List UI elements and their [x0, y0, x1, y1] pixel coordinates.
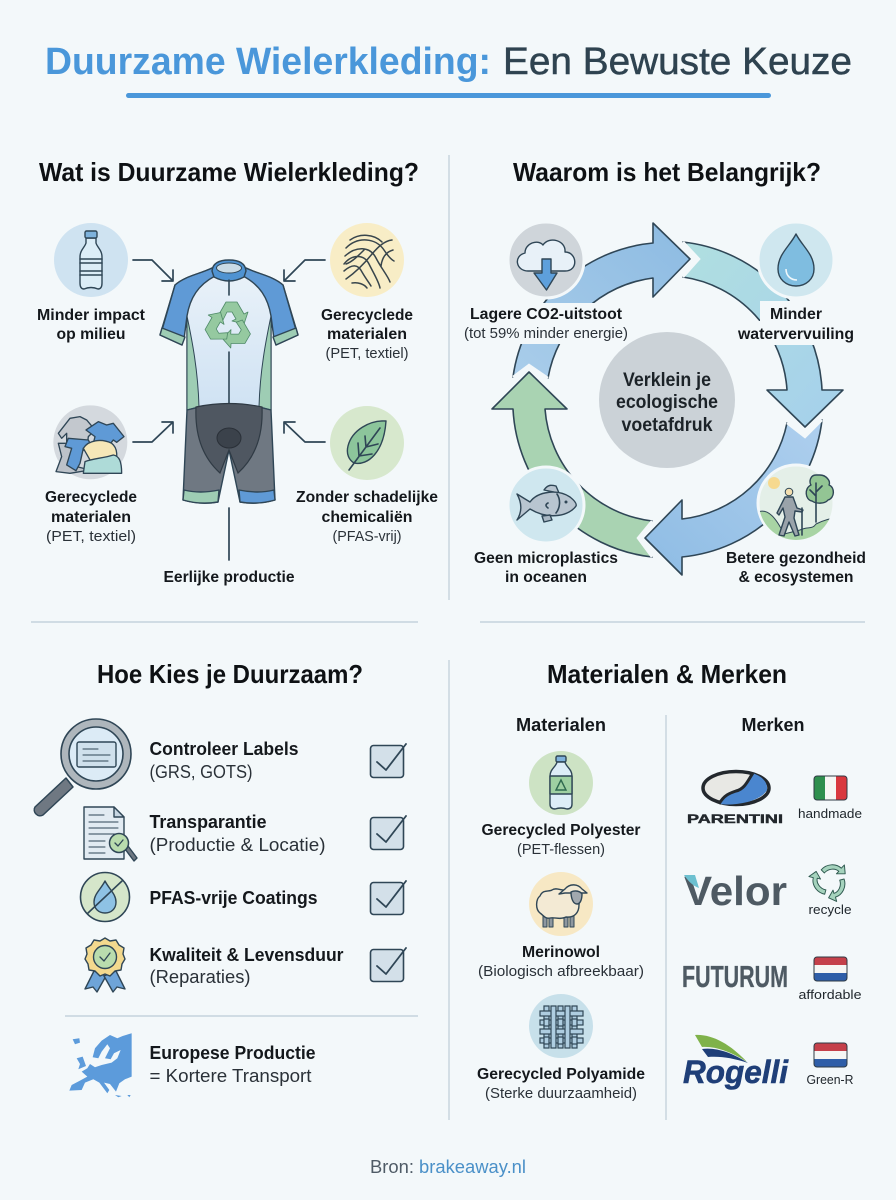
label: controleer labels: (GRS, GOTS)	[150, 762, 252, 782]
checkbox 2	[370, 816, 406, 850]
logo: rogelli	[683, 1035, 789, 1090]
label: gerecyclede materialen rechts: (PET, textiel)	[326, 345, 408, 362]
label: europese productie: Europese Productie	[150, 1043, 316, 1063]
label: minder watervervuiling: watervervuiling	[737, 326, 854, 343]
label: merinowol	[478, 944, 644, 980]
title: Duurzame Wielerkleding:	[45, 41, 491, 83]
icon: plastic bottle	[54, 223, 128, 297]
logo: futurum: FUTURUM	[682, 959, 788, 994]
icon: fish	[508, 467, 584, 543]
flag: netherlands 1	[814, 957, 847, 981]
checkbox 4	[370, 948, 406, 982]
arrows to jersey	[133, 260, 325, 560]
label: kwaliteit en levensduur: Kwaliteit & Levensduur	[150, 945, 344, 965]
cycling shorts	[183, 404, 275, 503]
label: gerecycled polyamide: (Sterke duurzaamheid)	[485, 1085, 637, 1102]
label: kwaliteit en levensduur: (Reparaties)	[150, 967, 250, 987]
label: kwaliteit en levensduur	[150, 945, 344, 987]
label: zonder schadelijke chemicalien: Zonder schadelijke	[296, 489, 438, 506]
icon: document with check	[84, 807, 137, 861]
checkbox 1	[370, 744, 406, 778]
label: minder watervervuiling: Minder	[770, 306, 822, 323]
logo: velor: Velor	[684, 868, 787, 914]
cycle arrows	[463, 223, 856, 575]
icon: hiker in nature	[758, 465, 836, 545]
label: pfas-vrije coatings: PFAS-vrije Coatings	[150, 888, 318, 908]
label: gerecycled polyamide	[477, 1066, 645, 1102]
label: eerlijke productie: Eerlijke productie	[164, 569, 295, 586]
center circle: voetafdruk	[622, 415, 713, 436]
label: minder impact: op milieu	[56, 326, 126, 343]
icon: cloud with down arrow	[508, 222, 584, 298]
label: gerecyclede materialen links: materialen	[51, 509, 131, 526]
label: transparantie	[150, 812, 326, 855]
label: controleer labels: Controleer Labels	[150, 739, 298, 759]
label: zonder schadelijke chemicalien: (PFAS-vrij)	[332, 528, 402, 545]
label: transparantie: Transparantie	[150, 812, 266, 832]
panel: waarom is het belangrijk	[463, 157, 866, 586]
label: europese productie	[150, 1043, 316, 1086]
title underline	[126, 93, 771, 98]
label: europese productie: = Kortere Transport	[150, 1066, 312, 1086]
logo: rogelli: Rogelli	[683, 1054, 789, 1090]
label: gerecycled polyester: (PET-flessen)	[517, 841, 605, 858]
label: minder impact: Minder impact	[37, 307, 146, 324]
label: betere gezondheid	[726, 550, 866, 586]
label: zonder schadelijke chemicalien: chemicaliën	[322, 509, 412, 526]
icon: yarn fibres	[330, 223, 404, 297]
label: gerecyclede materialen rechts	[321, 307, 413, 362]
icon: recycle symbol	[200, 302, 254, 353]
label: transparantie: (Productie & Locatie)	[150, 835, 326, 855]
source footer: Bron: brakeaway.nl	[370, 1157, 526, 1177]
label: betere gezondheid: & ecosystemen	[738, 569, 854, 586]
label: merinowol: (Biologisch afbreekbaar)	[478, 963, 644, 980]
icon: woven fabric	[529, 994, 593, 1058]
column heading: merken: Merken	[742, 715, 804, 735]
icon: sheep	[529, 872, 593, 936]
heading: materialen en merken: Materialen & Merken	[547, 659, 787, 689]
icon: leaf	[330, 406, 404, 480]
label: gerecycled polyamide: Gerecycled Polyamide	[477, 1066, 645, 1083]
icon: quality badge	[85, 938, 125, 992]
label: betere gezondheid: Betere gezondheid	[726, 550, 866, 567]
label: gerecyclede materialen links: (PET, textiel)	[46, 528, 136, 545]
label: controleer labels	[150, 739, 298, 782]
label: lagere co2: (tot 59% minder energie)	[464, 325, 628, 342]
label: minder impact	[37, 307, 146, 343]
label: zonder schadelijke chemicalien	[296, 489, 438, 545]
icon: recycled bottle	[529, 751, 593, 815]
label: gerecyclede materialen rechts: Gerecyclede	[321, 307, 413, 324]
label: gerecyclede materialen links: Gerecyclede	[45, 489, 137, 506]
logo: parentini	[687, 772, 783, 826]
panel: materialen en merken	[477, 659, 862, 1102]
label: gerecycled polyester: Gerecycled Polyester	[482, 822, 640, 839]
checkbox 3	[370, 881, 406, 914]
label: gerecyclede materialen links	[45, 489, 137, 545]
label: recycle: recycle	[808, 902, 852, 917]
center circle: ecologische	[616, 392, 718, 413]
center circle	[599, 332, 735, 468]
icon: map of europe	[69, 1033, 132, 1097]
panel: hoe kies je duurzaam	[34, 659, 406, 1097]
icon: pile of clothes	[53, 405, 127, 479]
label: lagere co2: Lagere CO2-uitstoot	[470, 306, 623, 323]
label: geen microplastics: Geen microplastics	[474, 550, 618, 567]
logo: parentini: PARENTINI	[687, 814, 783, 826]
title	[45, 41, 852, 83]
label: green-r: Green-R	[806, 1072, 854, 1087]
icon: water drop	[758, 222, 834, 298]
label: affordable: affordable	[798, 987, 862, 1002]
flag: netherlands 2	[814, 1043, 847, 1067]
label: geen microplastics	[474, 550, 618, 586]
heading: waarom: Waarom is het Belangrijk?	[513, 157, 821, 187]
flag: italy	[814, 776, 847, 800]
icon: magnifying glass on label	[34, 719, 131, 816]
label: handmade: handmade	[798, 806, 862, 821]
label: gerecycled polyester	[482, 822, 640, 858]
center circle: Verklein je	[623, 370, 711, 391]
heading: wat is: Wat is Duurzame Wielerkleding?	[39, 157, 419, 187]
cycling kit illustration	[160, 260, 298, 503]
heading: hoe kies: Hoe Kies je Duurzaam?	[97, 659, 363, 689]
label: minder watervervuiling	[737, 306, 854, 343]
label: geen microplastics: in oceanen	[505, 569, 587, 586]
icon: pfas free drop	[80, 872, 130, 922]
label: lagere co2	[464, 306, 628, 342]
label: merinowol: Merinowol	[522, 944, 600, 961]
title: Een Bewuste Keuze	[503, 41, 852, 83]
panel: wat is duurzame wielerkleding	[37, 157, 438, 586]
icon: recycle	[808, 865, 848, 902]
label: gerecyclede materialen rechts: materialen	[327, 326, 407, 343]
column heading: materialen: Materialen	[516, 715, 606, 735]
